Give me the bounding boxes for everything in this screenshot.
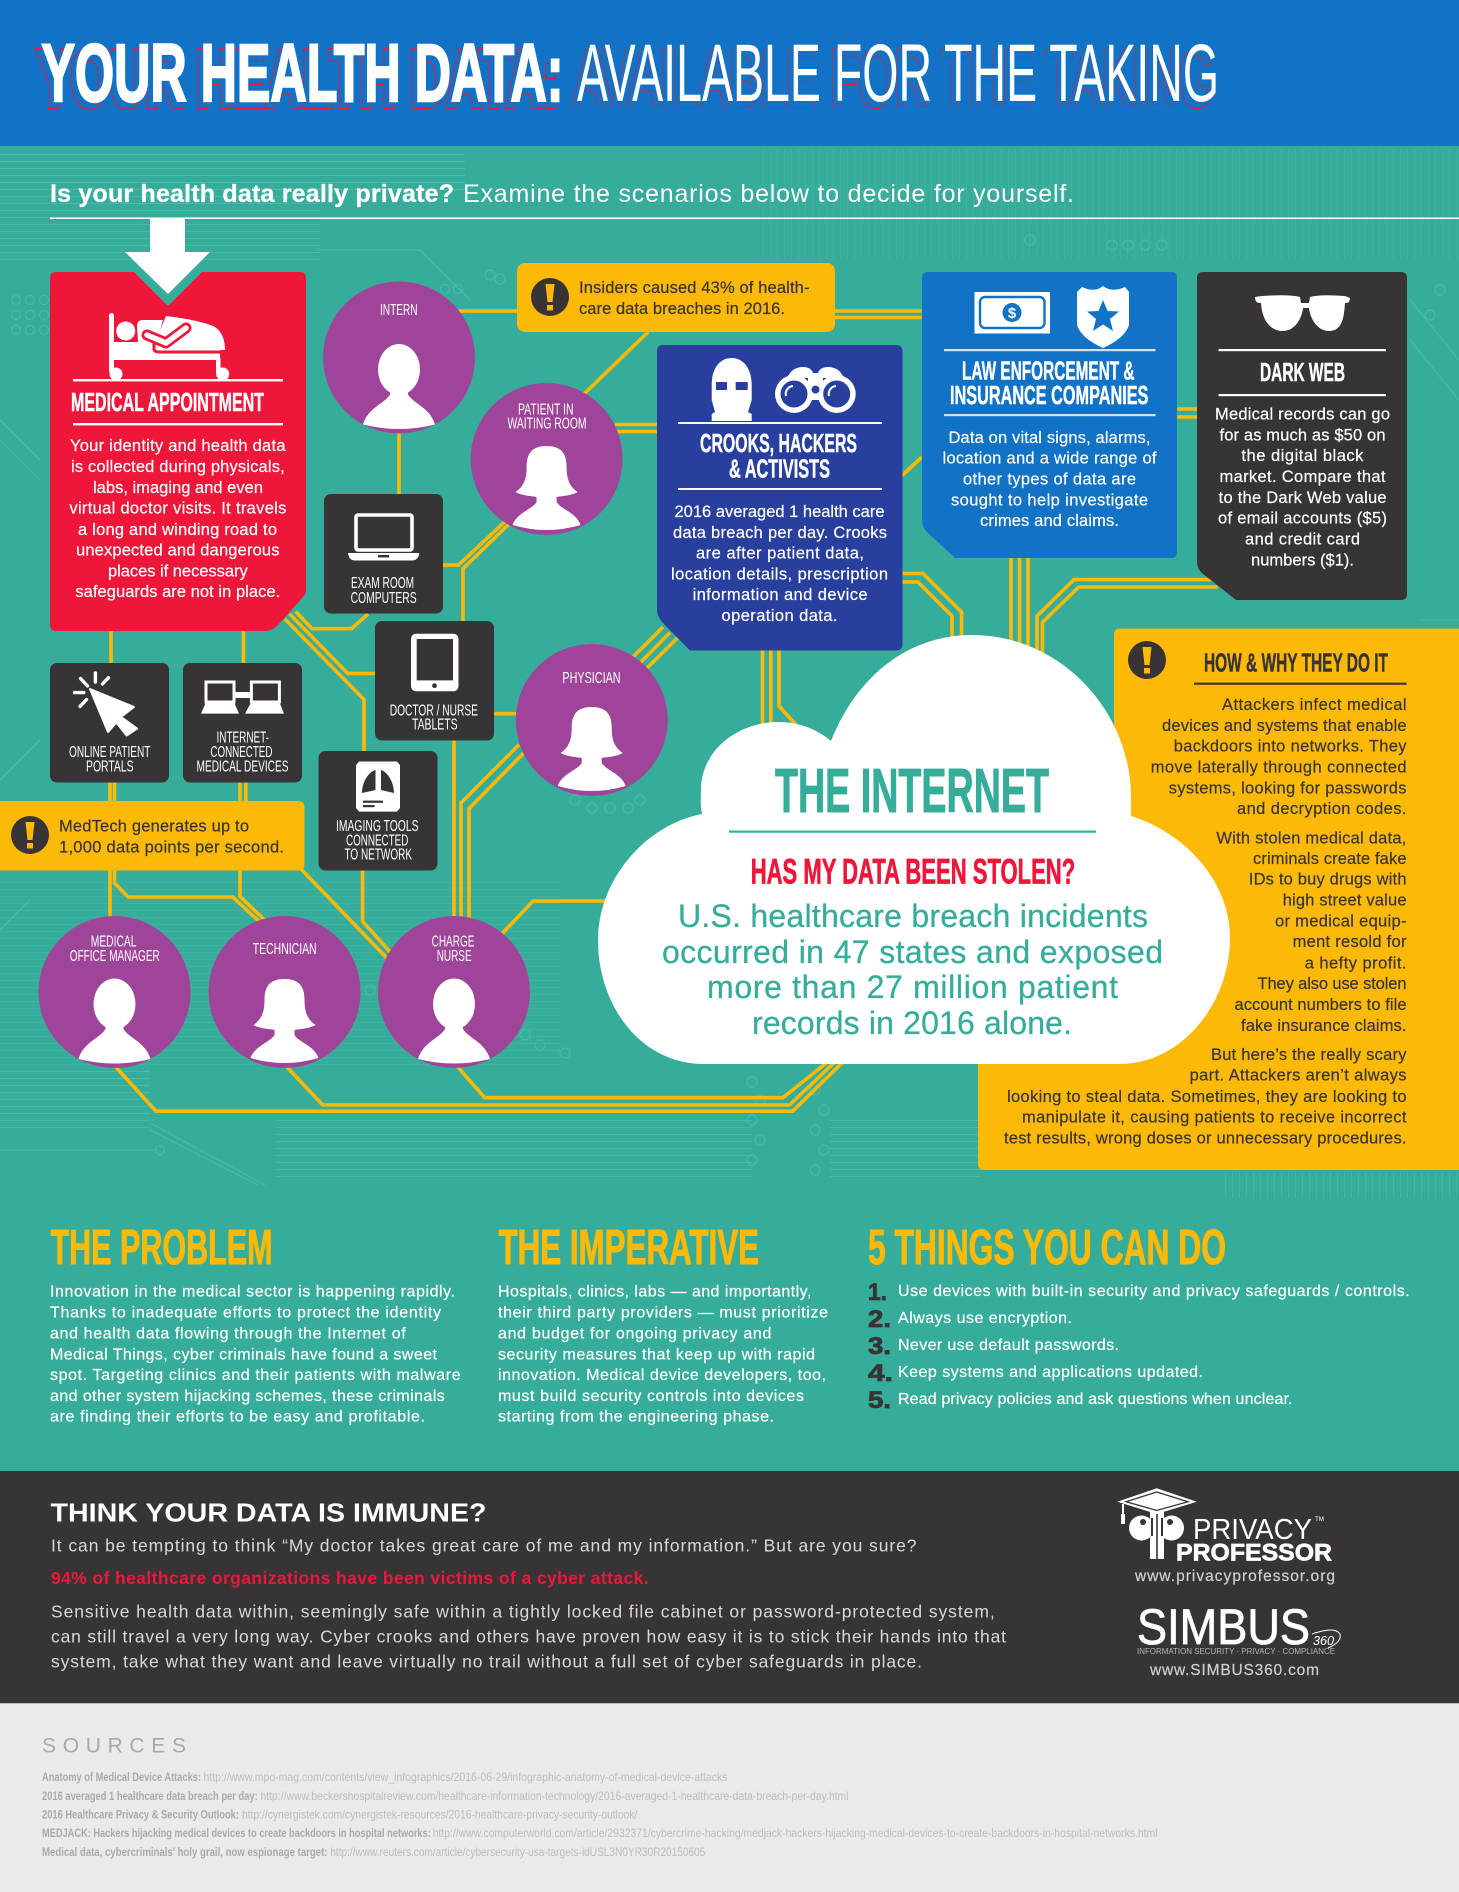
node: charge nurse [378,916,530,1068]
text: crooks body [671,503,888,625]
text: how and why body: and decryption codes. [1237,800,1406,818]
text: medical appointment body: safeguards are not in place. [75,583,280,601]
panel: sources [0,1703,1459,1892]
list: five actions: Use devices with built-in security and privacy safeguards / controls. [898,1283,1410,1300]
icon: alert [1128,641,1166,679]
list: five actions: 1. [868,1279,887,1306]
text: sensitive health data: system, take what they want and leave virtually no trail without a full set of cyber safeguards in place. [51,1652,922,1672]
list: five actions: Keep systems and applications updated. [898,1364,1203,1381]
text: how and why body: But here’s the really scary [1211,1046,1407,1064]
text: crooks body: 2016 averaged 1 health care [674,503,884,521]
icon: tablet [411,634,458,691]
text: crooks body: location details, prescription [671,565,888,583]
text: medical appointment body: unexpected and dangerous [76,542,280,560]
text: source list: Medical data, cybercriminals’ holy grail, now espionage target: [42,1845,328,1859]
text: problem body: and other system hijacking schemes, these criminals [50,1388,445,1405]
callout: insiders [517,263,835,332]
text: dark web body: and credit card [1245,530,1360,548]
section: 5 things you can do [868,1221,1410,1414]
section: the imperative [498,1221,828,1426]
section: the problem [50,1221,461,1426]
panel: the internet cloud [598,635,1230,1064]
title: YOUR HEALTH DATA: [36,34,558,124]
icon: linked laptops [201,682,284,714]
text: breach statistic: records in 2016 alone. [752,1005,1072,1041]
heading: law enforcement: LAW ENFORCEMENT & [962,356,1134,386]
node: charge nurse: NURSE [437,948,472,965]
text: problem body: Innovation in the medical sector is happening rapidly. [50,1284,455,1301]
list: five actions: 2. [868,1306,891,1333]
text: imperative body: must build security controls into devices [498,1388,804,1405]
text: how and why body [1004,696,1407,1148]
logo: simbus 360: INFORMATION SECURITY · PRIVACY · COMPLIANCE [1137,1646,1335,1656]
device: doctor and nurse tablets [375,621,494,740]
device: doctor and nurse tablets: TABLETS [412,717,458,734]
text: breach statistic: U.S. healthcare breach incidents [678,898,1148,934]
list: five actions: Never use default passwords. [898,1337,1119,1354]
icon: binoculars [775,367,856,413]
heading: has my data been stolen: HAS MY DATA BEEN STOLEN? [751,853,1075,892]
device: internet-connected medical devices: MEDICAL DEVICES [196,758,288,775]
node: intern: INTERN [380,302,418,319]
yellow circuit connectors [110,311,1218,1111]
text: red statistic: 94% of healthcare organizations have been victims of a cyber attack. [51,1568,649,1588]
text: how and why body: backdoors into networks. They [1174,738,1407,756]
text: dark web body: of email accounts ($5) [1218,510,1387,528]
icon: banknote: $ [1008,305,1017,322]
text: imperative body: and budget for ongoing privacy and [498,1325,771,1342]
text: medtech statistic [59,818,284,857]
logo: simbus 360: SIMBUS [1137,1599,1310,1655]
band: think your data is immune [0,1471,1459,1703]
heading: law enforcement: INSURANCE COMPANIES [950,380,1148,410]
text: source list: 2016 averaged 1 healthcare data breach per day: [42,1789,258,1803]
text: problem body: are finding their efforts to be easy and profitable. [50,1409,425,1426]
text: problem body: spot. Targeting clinics and their patients with malware [50,1367,461,1384]
text: privacy professor url: www.privacyprofessor.org [1134,1568,1335,1585]
device: online patient portals [50,663,169,782]
list: five actions: 4. [868,1360,893,1387]
node: technician [208,916,360,1068]
heading: law enforcement [950,356,1148,410]
text: dark web body: Medical records can go [1215,406,1390,424]
text: simbus url: www.SIMBUS360.com [1149,1662,1319,1679]
intro sentence: Examine the scenarios below to decide for yourself. [463,180,1074,208]
text: problem body: and health data flowing through the Internet of [50,1325,406,1342]
intro sentence: Is your health data really private? [50,180,454,208]
text: breach statistic: more than 27 million patient [707,969,1118,1005]
icon: cursor click [74,673,137,736]
text: imperative body: innovation. Medical device developers, too, [498,1367,826,1384]
list: five actions: 5. [868,1387,891,1414]
heading: medical appointment: MEDICAL APPOINTMENT [71,387,264,417]
device: imaging tools connected to network: TO NETWORK [344,846,412,864]
text: how and why body: With stolen medical data, [1216,829,1406,847]
device: exam room computers: COMPUTERS [351,590,417,607]
heading: crooks: CROOKS, HACKERS [700,428,857,458]
text: insiders statistic [579,279,810,318]
panel: dark web [1197,272,1407,600]
text: dark web body [1215,406,1390,569]
text: law enforcement body: other types of data are [963,470,1136,488]
text: tempting thought: It can be tempting to think “My doctor takes great care of me and my information.” But are you sure? [51,1536,917,1556]
node: intern [323,282,475,434]
device: online patient portals: PORTALS [86,758,134,775]
icon: patient in hospital bed [73,313,283,425]
device: exam room computers: EXAM ROOM [351,575,414,592]
device: online patient portals: ONLINE PATIENT [69,744,151,761]
node: medical office manager [38,916,190,1068]
text: medical appointment body [69,437,286,601]
heading: dark web: DARK WEB [1260,357,1345,387]
text: medical appointment body: a long and winding road to [78,521,277,539]
text: dark web body: the digital black [1241,447,1364,465]
intro rule [50,218,1459,219]
title: YOUR HEALTH DATA: [36,34,558,124]
node: patient in waiting room: WAITING ROOM [508,416,586,433]
text: insiders statistic: care data breaches in 2016. [579,300,785,318]
text: problem body: Medical Things, cyber criminals have found a sweet [50,1346,438,1363]
text: how and why body: ment resold for [1293,933,1407,951]
node: medical office manager: MEDICAL [91,933,136,950]
text: how and why body: IDs to buy drugs with [1249,871,1406,889]
text: source list: http://www.mpo-mag.com/contents/view_infographics/2016-06-29/infographic-anatomy-of-medical-device-attacks [204,1770,728,1784]
panel: law enforcement and insurance companies [922,272,1177,558]
node: technician: TECHNICIAN [253,941,317,958]
heading: crooks [700,428,857,484]
text: problem body: Thanks to inadequate efforts to protect the identity [50,1304,441,1322]
text: medtech statistic: MedTech generates up to [59,818,249,836]
arrow: entry point [125,218,210,294]
heading: crooks: & ACTIVISTS [729,454,830,484]
text: sensitive health data: Sensitive health data within, seemingly safe within a tightly locked file cabinet or password-protected system, [51,1602,995,1622]
text: imperative body: their third party providers — must prioritize [498,1304,828,1322]
device: internet-connected medical devices: INTERNET- [216,729,269,746]
icon: banknote [974,292,1050,334]
teal notch under arrow [134,272,202,306]
text: medical appointment body: places if necessary [108,562,248,580]
device: internet-connected medical devices: CONNECTED [210,744,272,761]
list: five actions: 3. [868,1333,891,1360]
title: YOUR HEALTH DATA: [42,28,564,119]
icon: police badge [1077,286,1129,348]
text: how and why body: a hefty profit. [1305,954,1406,972]
text: medical appointment body: virtual doctor visits. It travels [69,500,286,518]
text: law enforcement body: crimes and claims. [980,512,1119,530]
logo: privacy professor: TM [1315,1516,1324,1523]
icon: alert [531,278,569,316]
node: charge nurse: CHARGE [432,933,474,950]
text: how and why body: systems, looking for passwords [1169,780,1406,798]
text: how and why body: criminals create fake [1253,850,1406,868]
text: law enforcement body: Data on vital signs, alarms, [948,429,1150,447]
heading: the internet: THE INTERNET [775,757,1049,826]
device: imaging tools connected to network: IMAGING TOOLS [336,818,418,835]
text: dark web body: to the Dark Web value [1219,489,1387,507]
header band [0,0,1459,146]
title: YOUR HEALTH DATA: [42,28,564,119]
text: how and why body: They also use stolen [1258,975,1406,993]
device: doctor and nurse tablets: DOCTOR / NURSE [390,703,478,720]
text: how and why body: or medical equip- [1275,912,1406,930]
node: patient in waiting room: PATIENT IN [518,401,574,418]
icon: sunglasses [1255,295,1350,331]
device: internet-connected medical devices [183,663,302,782]
logo: privacy professor: PRIVACY [1193,1514,1312,1546]
list: five actions: Always use encryption. [898,1310,1072,1327]
teal circuit background [0,146,1459,1471]
text: source list: http://www.reuters.com/article/cybersecurity-usa-targets-idUSL3N0YR30R20150605 [330,1845,706,1859]
callout: medtech [0,801,304,870]
heading: sources: SOURCES [42,1735,186,1758]
text: how and why body: test results, wrong doses or unnecessary procedures. [1004,1130,1406,1148]
panel: medical appointment [50,272,306,631]
logo: privacy professor [1117,1488,1332,1567]
text: source list: http://cynergistek.com/cynergistek-resources/2016-healthcare-privacy-security-outlook/ [242,1808,638,1822]
text: how and why body: devices and systems that enable [1162,717,1406,735]
text: how and why body: part. Attackers aren’t always [1190,1067,1406,1085]
text: sensitive health data [51,1602,1006,1672]
title [36,28,1219,124]
text: insiders statistic: Insiders caused 43% of health- [579,279,810,297]
text: law enforcement body: sought to help investigate [951,491,1148,509]
text: crooks body: are after patient data, [696,545,864,563]
icon: lung x-ray [356,762,400,812]
text: crooks body: data breach per day. Crooks [673,524,887,542]
text: source list: 2016 Healthcare Privacy & Security Outlook: [42,1808,239,1822]
text: how and why body: account numbers to file [1234,996,1406,1014]
node: physician [516,644,668,796]
text: problem body [50,1284,461,1426]
node: physician: PHYSICIAN [562,670,621,687]
node: patient in waiting room [471,383,623,535]
text: dark web body: market. Compare that [1220,468,1386,486]
text: sensitive health data: can still travel a very long way. Cyber crooks and others have proven how easy it is to stick their hands into that [51,1627,1006,1647]
text: medtech statistic: 1,000 data points per second. [59,839,284,857]
text: law enforcement body: location and a wide range of [942,450,1157,468]
text: medical appointment body: is collected during physicals, [71,458,285,476]
logo: simbus 360: 360 [1313,1633,1335,1648]
text: crooks body: operation data. [722,607,838,625]
section: the imperative: THE IMPERATIVE [498,1221,759,1275]
section: the problem: THE PROBLEM [50,1221,272,1275]
text: breach statistic: occurred in 47 states and exposed [662,934,1163,970]
text: crooks body: information and device [693,586,868,604]
text: source list: Anatomy of Medical Device Attacks: [42,1770,201,1784]
text: source list: http://www.computerworld.com/article/2932371/cybercrime-hacking/medjack-hackers-hijacking-medical-devices-to-create-backdoors-in-hospital-networks.html [433,1826,1158,1840]
panel: how and why they do it [978,629,1459,1170]
text: how and why body: Attackers infect medical [1222,696,1406,714]
icon: alert [11,816,49,854]
text: how and why body: manipulate it, causing patients to receive incorrect [1022,1108,1407,1126]
device: exam room computers [324,494,443,614]
device: imaging tools connected to network [318,751,438,870]
device: imaging tools connected to network: CONNECTED [346,832,408,849]
text: imperative body: starting from the engineering phase. [498,1409,774,1426]
text: dark web body: for as much as $50 on [1220,426,1386,444]
text: imperative body [498,1284,828,1426]
text: imperative body: Hospitals, clinics, labs — and importantly, [498,1284,811,1301]
logo: privacy professor: PROFESSOR [1176,1540,1332,1567]
node: medical office manager: OFFICE MANAGER [70,948,160,965]
text: source list [42,1770,1158,1859]
text: law enforcement body [942,429,1157,530]
text: how and why body: fake insurance claims. [1241,1017,1406,1035]
list: five actions: Read privacy policies and ask questions when unclear. [898,1391,1292,1408]
text: how and why body: high street value [1283,892,1406,910]
text: source list: http://www.beckershospitalreview.com/healthcare-information-technology/2016-averaged-1-healthcare-data-breach-per-day.html [260,1789,848,1803]
panel: crooks, hackers and activists [657,345,902,650]
icon: laptop [348,515,420,560]
text: dark web body: numbers ($1). [1251,551,1354,569]
icon: balaclava mask [712,358,752,421]
text: source list: MEDJACK: Hackers hijacking medical devices to create backdoors in hospital networks: [42,1826,431,1840]
text: how and why body: move laterally through connected [1151,759,1406,777]
text: breach statistic [662,898,1163,1041]
text: how and why body: looking to steal data. Sometimes, they are looking to [1007,1088,1406,1106]
list: five actions [868,1279,1410,1414]
text: imperative body: security measures that keep up with rapid [498,1346,815,1363]
text: medical appointment body: Your identity and health data [70,437,286,455]
section: 5 things you can do: 5 THINGS YOU CAN DO [868,1221,1226,1275]
text: medical appointment body: labs, imaging and even [93,479,263,497]
heading: think your data is immune: THINK YOUR DATA IS IMMUNE? [50,1498,486,1528]
